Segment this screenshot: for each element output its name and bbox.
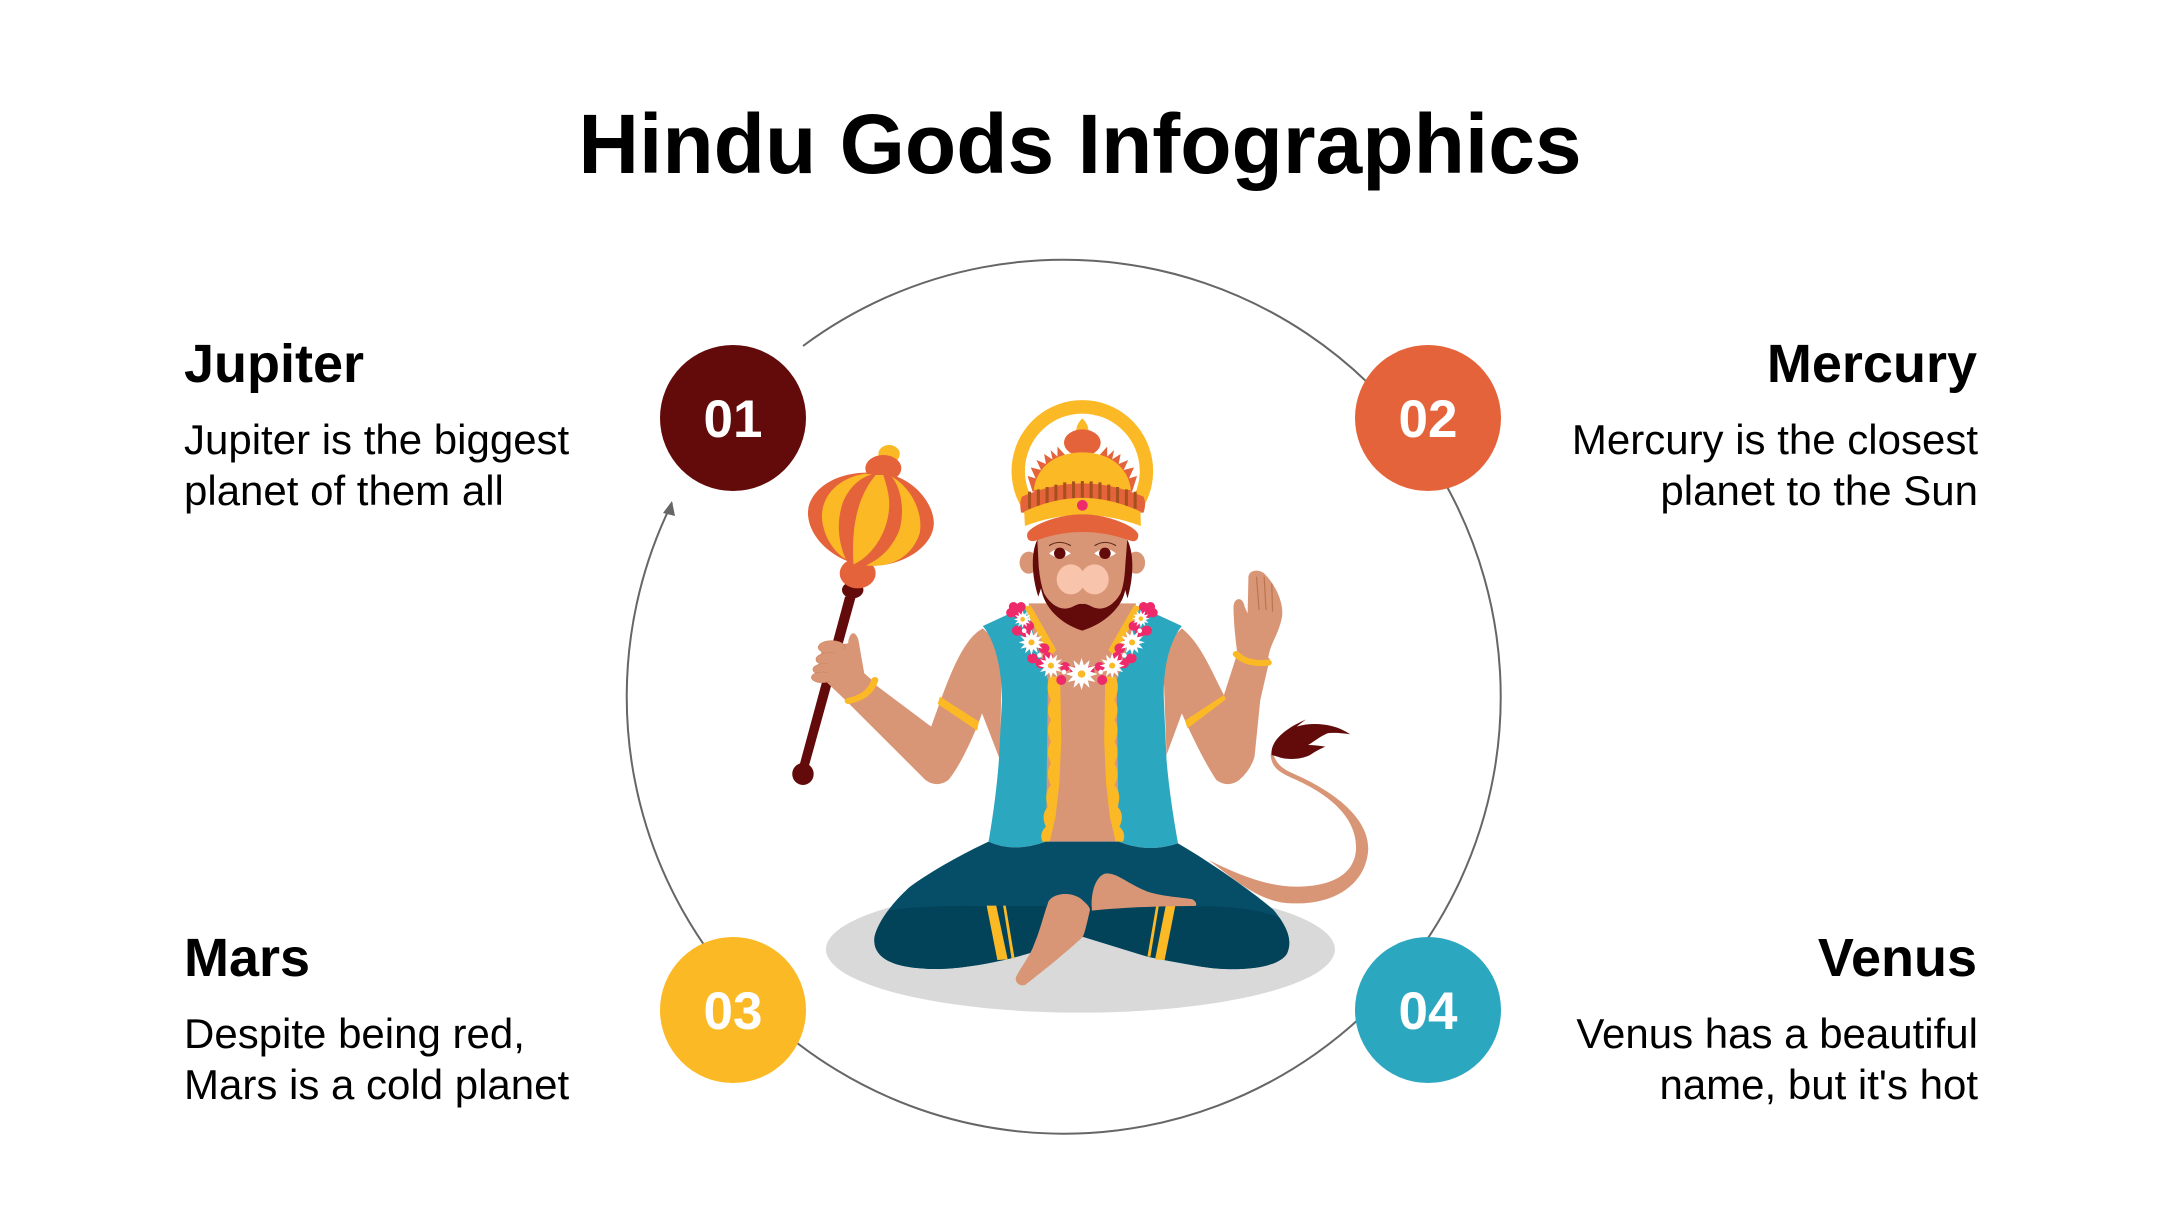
left arm and hand — [811, 628, 1002, 784]
text block: Venus — [1576, 928, 1978, 1108]
feet — [1016, 873, 1196, 985]
crown lower band — [1027, 514, 1138, 541]
muzzle — [1057, 564, 1109, 594]
text block: Mercury: planet to the Sun — [1660, 467, 1978, 514]
illustration: Hindu god figure — [792, 400, 1368, 1013]
vest — [983, 607, 1182, 848]
tail — [1209, 719, 1368, 903]
vest trim — [1024, 605, 1141, 842]
crown gold band — [1024, 498, 1141, 526]
text block: Mars: Despite being red, — [184, 1010, 525, 1057]
text block: Jupiter: Jupiter is the biggest — [184, 416, 570, 463]
text block: Jupiter: planet of them all — [184, 467, 504, 514]
badge 01 — [660, 345, 806, 491]
badge 03 — [660, 937, 806, 1083]
crown rays — [1028, 447, 1137, 492]
crown finial — [1064, 418, 1101, 456]
eyes — [1049, 542, 1116, 559]
badge 02: 02 — [1399, 390, 1457, 449]
text block: Mercury: Mercury is the closest — [1572, 416, 1978, 463]
garland — [1006, 602, 1158, 690]
right bracelets — [1185, 654, 1268, 728]
text block: Jupiter — [184, 334, 570, 514]
badge 03: 03 — [704, 982, 762, 1041]
crown jewel — [1077, 500, 1088, 511]
halo — [1012, 400, 1153, 508]
hair and beard — [1033, 540, 1132, 631]
crown dome — [1034, 452, 1131, 490]
chest — [1029, 603, 1136, 842]
text block: Mars: Mars is a cold planet — [184, 1061, 570, 1108]
badge 04 — [1355, 937, 1501, 1083]
ground shadow — [826, 886, 1335, 1013]
mace — [792, 445, 934, 785]
badge 02 — [1355, 345, 1501, 491]
cycle ring with arrow — [627, 260, 1501, 1134]
text block: Venus: name, but it's hot — [1659, 1061, 1978, 1108]
badge 01: 01 — [704, 390, 762, 449]
text block: Venus: Venus has a beautiful — [1576, 1010, 1978, 1057]
text block: Mars — [184, 928, 570, 1108]
text block: Jupiter: Jupiter — [184, 334, 364, 394]
face — [1037, 530, 1127, 609]
pants — [874, 842, 1290, 970]
ears — [1020, 552, 1145, 574]
right arm and hand — [1163, 571, 1282, 784]
badge 04: 04 — [1399, 982, 1458, 1041]
left bracelets — [848, 680, 979, 731]
text block: Mercury: Mercury — [1767, 334, 1977, 394]
crown striped band — [1020, 481, 1145, 513]
text block: Venus: Venus — [1818, 928, 1977, 988]
title: Hindu Gods Infographics — [578, 97, 1582, 191]
head — [1012, 400, 1153, 631]
text block: Mercury — [1572, 334, 1978, 514]
text block: Mars: Mars — [184, 928, 310, 988]
